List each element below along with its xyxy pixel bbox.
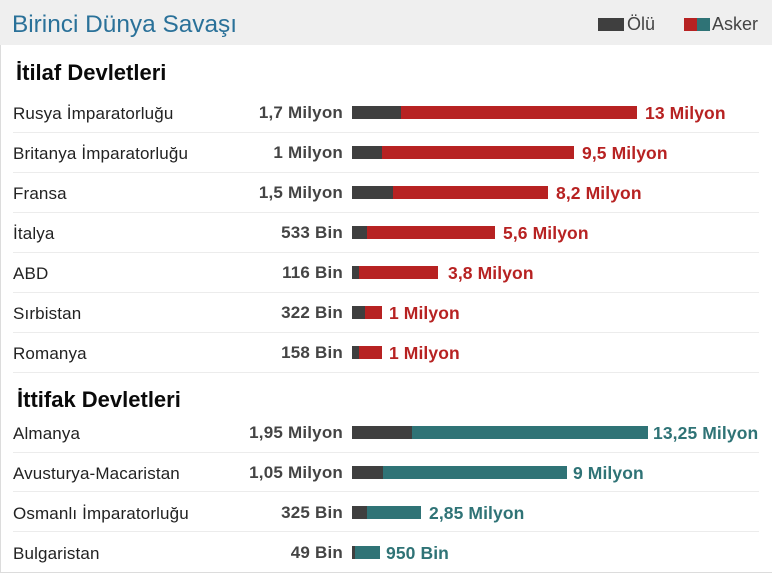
row: Rusya: 1,7 Milyon bbox=[259, 103, 343, 122]
legend: dead bbox=[598, 14, 655, 34]
row: Sırbistan bbox=[13, 303, 759, 333]
row: Almanya bbox=[13, 423, 759, 453]
row: Romanya: 1 Milyon bbox=[389, 343, 460, 363]
row: Rusya: 13 Milyon bbox=[645, 103, 726, 123]
row: Rusya bbox=[13, 103, 759, 133]
row: Romanya bbox=[13, 343, 759, 373]
row: Osmanlı İmparatorluğu: 2,85 Milyon bbox=[429, 503, 524, 523]
row: Sırbistan: 322 Bin bbox=[281, 303, 343, 322]
row: Britanya: 9,5 Milyon bbox=[582, 143, 668, 163]
heading: Entente: İtilaf Devletleri bbox=[16, 60, 166, 85]
row: İtalya: İtalya bbox=[13, 224, 54, 243]
row: Osmanlı İmparatorluğu bbox=[13, 503, 759, 532]
row: Britanya bbox=[13, 143, 759, 173]
row: İtalya: 533 Bin bbox=[281, 223, 343, 242]
row: İtalya: 5,6 Milyon bbox=[503, 223, 589, 243]
row: Almanya: 1,95 Milyon bbox=[249, 423, 343, 442]
row: Britanya: 1 Milyon bbox=[273, 143, 343, 162]
title: Birinci Dünya Savaşı bbox=[12, 11, 237, 38]
row: Bulgaristan: Bulgaristan bbox=[13, 544, 100, 563]
row: ABD: 3,8 Milyon bbox=[448, 263, 534, 283]
row: Avusturya-Macaristan: 1,05 Milyon bbox=[249, 463, 343, 482]
row: ABD: ABD bbox=[13, 264, 48, 283]
legend: soldiers: Asker bbox=[712, 14, 758, 34]
row: Almanya: Almanya bbox=[13, 424, 80, 443]
row: Bulgaristan: 950 Bin bbox=[386, 543, 449, 563]
row: Bulgaristan: 49 Bin bbox=[291, 543, 343, 562]
row: Britanya: Britanya İmparatorluğu bbox=[13, 144, 188, 163]
row: Fransa: Fransa bbox=[13, 184, 67, 203]
heading: Central Powers: İttifak Devletleri bbox=[17, 387, 181, 412]
row: Avusturya-Macaristan bbox=[13, 463, 759, 492]
row: ABD bbox=[13, 263, 759, 293]
row: Fransa bbox=[13, 183, 759, 213]
row: Almanya: 13,25 Milyon bbox=[653, 423, 758, 443]
row: Romanya: 158 Bin bbox=[281, 343, 343, 362]
row: Sırbistan: 1 Milyon bbox=[389, 303, 460, 323]
row: Romanya: Romanya bbox=[13, 344, 87, 363]
row: Sırbistan: Sırbistan bbox=[13, 304, 81, 323]
legend: soldiers bbox=[684, 14, 758, 34]
row: Avusturya-Macaristan: Avusturya-Macaristan bbox=[13, 464, 180, 483]
row: Rusya: Rusya İmparatorluğu bbox=[13, 104, 173, 123]
row: Fransa: 8,2 Milyon bbox=[556, 183, 642, 203]
row: Bulgaristan bbox=[13, 543, 449, 563]
row: Osmanlı İmparatorluğu: 325 Bin bbox=[281, 503, 343, 522]
header bar bbox=[0, 0, 772, 45]
row: Fransa: 1,5 Milyon bbox=[259, 183, 343, 202]
row: Osmanlı İmparatorluğu: Osmanlı İmparatorluğu bbox=[13, 504, 189, 523]
row: İtalya bbox=[13, 223, 759, 253]
legend: dead: Ölü bbox=[627, 14, 655, 34]
row: ABD: 116 Bin bbox=[282, 263, 343, 282]
row: Avusturya-Macaristan: 9 Milyon bbox=[573, 463, 644, 483]
